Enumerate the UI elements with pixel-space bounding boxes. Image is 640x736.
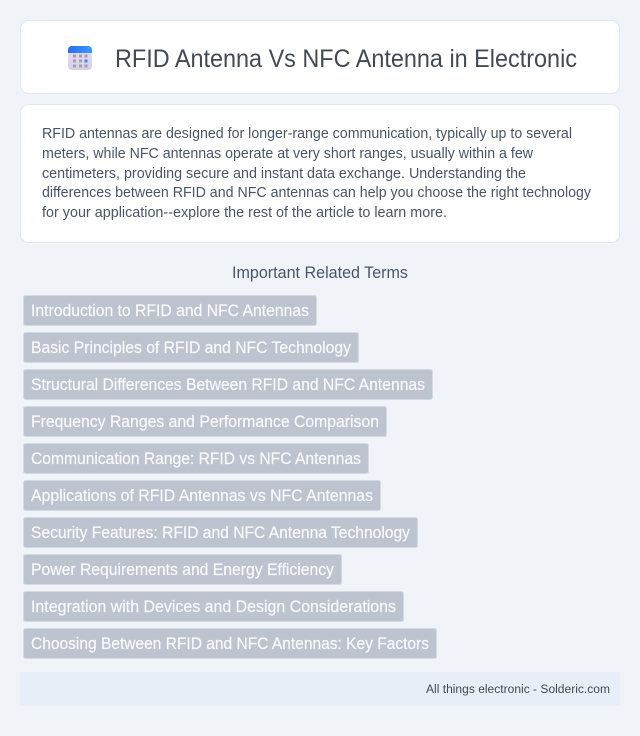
tag 8: Power Requirements and Energy Efficiency — [31, 560, 335, 579]
tag 5 — [24, 444, 368, 474]
tag 8 — [24, 554, 342, 584]
tag 4 — [24, 406, 386, 436]
tag 1: Introduction to RFID and NFC Antennas — [31, 301, 309, 320]
tag 6 — [24, 480, 380, 510]
heading: related terms: Important Related Terms — [232, 264, 408, 282]
footer — [20, 672, 620, 706]
text block: intro: differences between RFID and NFC antennas can help you choose the right technology — [42, 184, 591, 201]
footer: All things electronic - Solderic.com — [426, 682, 610, 696]
tag 4: Frequency Ranges and Performance Comparison — [31, 412, 379, 431]
text block: intro: RFID antennas are designed for longer-range communication, typically up to several — [42, 125, 572, 142]
text block: intro: for your application--explore the rest of the article to learn more. — [42, 204, 447, 221]
tag 10 — [24, 628, 436, 658]
tag 5: Communication Range: RFID vs NFC Antennas — [31, 449, 361, 468]
tag 9 — [24, 592, 404, 622]
text block: intro: centimeters, providing secure and instant data exchange. Understanding the — [42, 165, 526, 182]
tag 3 — [24, 370, 432, 400]
tag 7 — [24, 518, 418, 548]
list: related term tags — [24, 296, 436, 658]
tag 6: Applications of RFID Antennas vs NFC Antennas — [31, 486, 373, 505]
icon: calendar — [68, 46, 92, 70]
tag 10: Choosing Between RFID and NFC Antennas: Key Factors — [31, 634, 429, 653]
tag 9: Integration with Devices and Design Considerations — [31, 597, 396, 616]
panel: title card — [20, 20, 620, 94]
text block: intro: meters, while NFC antennas operate at very short ranges, usually within a few — [42, 145, 533, 162]
tag 2 — [24, 332, 358, 362]
title: RFID Antenna Vs NFC Antenna in Electronic — [115, 46, 577, 73]
text block: intro — [42, 125, 591, 221]
tag 3: Structural Differences Between RFID and NFC Antennas — [31, 375, 425, 394]
panel: intro paragraph — [20, 104, 620, 242]
tag 7: Security Features: RFID and NFC Antenna Technology — [31, 523, 411, 542]
tag 1 — [24, 296, 316, 326]
tag 2: Basic Principles of RFID and NFC Technology — [31, 338, 352, 357]
